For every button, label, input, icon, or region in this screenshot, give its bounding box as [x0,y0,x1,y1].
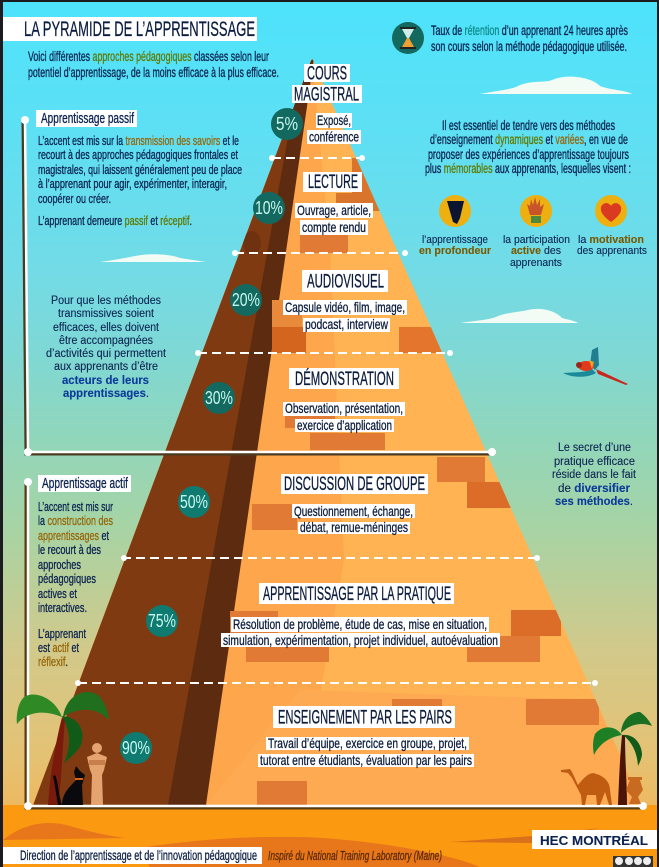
right intro text [425,118,631,176]
icon captions [419,234,647,269]
panel: passive learning: recourt à des approches pédagogiques frontales et [38,147,238,162]
icon: camel [561,769,612,805]
panel: active learning: L’apprenant [38,626,86,641]
pyramid bricks [230,158,599,805]
right note on diversifying methods: pratique efficace [554,456,635,468]
panel: active learning [38,475,131,669]
panel: active learning: le recourt à des [38,542,101,557]
left note on transmissive methods: transmissives soient [58,308,155,320]
level 6: apprentissage par la pratique: simulation, expérimentation, projet individuel, autoévaluation [223,632,498,648]
footer: direction label: Direction de l’apprentissage et de l’innovation pédagogique [20,847,257,863]
level 1: cours magistral: MAGISTRAL [294,84,359,106]
panel: active learning: actives et [38,586,77,601]
left note on transmissive methods: apprentissages. [63,388,149,400]
panel: passive learning: L’apprenant demeure passif et réceptif. [38,213,192,228]
panel: active learning: interactives. [38,600,87,615]
intro text: Voici différentes approches pédagogiques classées selon leur [28,48,269,64]
panel: passive learning: Apprentissage passif [41,111,135,127]
panel: passive learning: coopérer ou créer. [38,191,111,206]
level 5: discussion de groupe: 50% [180,492,208,512]
icon captions: la motivation [578,234,644,246]
level 2: lecture: Ouvrage, article, [297,202,371,218]
panel: active learning: est actif et [38,640,79,655]
level 7: enseignement par les pairs: 90% [122,738,150,758]
left note on transmissive methods: efficaces, elles doivent [53,322,160,334]
panel: active learning: apprentissages et [38,528,109,543]
panel: passive learning: magistrales, qui laissent généralement peu de place [38,162,242,177]
level 2: lecture: 10% [255,198,283,218]
right intro text: d’enseignement dynamiques et variées, en vue de [430,132,628,147]
logo: HEC Montréal [532,830,657,849]
level 7: enseignement par les pairs: ENSEIGNEMENT PAR LES PAIRS [278,708,452,728]
footer: direction label [3,847,262,864]
level 5: discussion de groupe: Questionnement, échange, [294,503,413,519]
left note on transmissive methods [46,295,167,400]
panel: active learning: pédagogiques [38,571,96,586]
level 5: discussion de groupe: débat, remue-méninges [300,519,408,535]
level 6: apprentissage par la pratique: 75% [148,611,176,631]
clouds [100,77,632,323]
icon: heart [595,195,627,227]
panel: active learning: L’accent est mis sur [38,499,113,514]
level 7: enseignement par les pairs [120,706,474,768]
frame: passive learning bracket [21,116,496,456]
level 7: enseignement par les pairs: Travail d’équipe, exercice en groupe, projet, [268,735,467,751]
retention legend text [431,23,628,54]
title: LA PYRAMIDE DE L’APPRENTISSAGE [24,18,255,41]
level 2: lecture: LECTURE [308,172,358,193]
ground and dunes [3,805,657,867]
dashed level separators [75,155,598,686]
icon captions: des apprenants [577,245,647,257]
icon: raised hand [520,195,552,227]
right note on diversifying methods [552,442,637,508]
left note on transmissive methods: aux apprenants d’être [54,361,158,373]
creative commons badge [613,856,653,867]
icon captions: apprenants [510,257,562,269]
level 1: cours magistral [271,64,362,144]
level 5: discussion de groupe [178,474,428,535]
left note on transmissive methods: Pour que les méthodes [51,295,161,307]
panel: passive learning: L’accent est mis sur la transmission des savoirs et le [38,133,239,148]
icon captions: l’apprentissage [422,234,488,246]
level 2: lecture [253,172,373,235]
icon: mummy statue [87,743,107,805]
right note on diversifying methods: de diversifier [558,483,631,495]
level 6: apprentissage par la pratique [146,583,500,648]
level 7: enseignement par les pairs: tutorat entre étudiants, évaluation par les pairs [260,752,472,768]
level 4: demonstration: Observation, présentation, [285,400,403,416]
panel: active learning: la construction des [38,513,113,528]
level 4: demonstration: exercice d’application [297,417,392,433]
frame: active learning bracket [24,478,647,810]
level 3: audiovisuel: Capsule vidéo, film, image, [285,299,405,315]
level 4: demonstration [203,368,405,433]
level 1: cours magistral: 5% [276,114,298,134]
left note on transmissive methods: acteurs de leurs [62,375,149,387]
intro text [28,48,279,80]
level 6: apprentissage par la pratique: APPRENTISSAGE PAR LA PRATIQUE [263,584,451,605]
right note on diversifying methods: Le secret d’une [558,442,631,454]
level 3: audiovisuel: AUDIOVISUEL [307,272,384,292]
level 1: cours magistral: COURS [307,64,347,84]
intro text: potentiel d’apprentissage, de la moins efficace à la plus efficace. [28,64,279,80]
level 2: lecture: compte rendu [302,219,366,235]
right note on diversifying methods: réside dans le fait [552,469,637,481]
panel: passive learning [36,110,242,228]
icon: parrot [563,347,628,385]
level 1: cours magistral: Exposé, [317,112,351,128]
left note on transmissive methods: d’activités qui permettent [46,348,167,360]
right note on diversifying methods: ses méthodes. [555,496,633,508]
left note on transmissive methods: être accompagnées [59,335,153,347]
level 5: discussion de groupe: DISCUSSION DE GROUPE [284,474,425,495]
level 4: demonstration: 30% [205,388,233,408]
level 3: audiovisuel [230,270,407,332]
level 1: cours magistral: conférence [309,128,359,144]
icon: deep learning [439,195,471,227]
icon: black cat [53,766,85,805]
icon captions: active des [511,245,561,257]
right palm tree [593,712,652,805]
level 3: audiovisuel: podcast, interview [305,316,389,332]
panel: active learning: approches [38,557,81,572]
panel: active learning: réflexif. [38,654,68,669]
hourglass icon [392,22,424,54]
icon captions: en profondeur [419,245,492,257]
icon: vase [626,777,643,804]
footer: source credit: Inspiré du National Training Laboratory (Maine) [268,848,442,863]
title [3,17,257,41]
level 4: demonstration: DÉMONSTRATION [295,369,394,390]
level 6: apprentissage par la pratique: Résolution de problème, étude de cas, mise en situation, [233,616,487,632]
panel: passive learning: à l’apprenant pour agir, expérimenter, interagir, [38,176,227,191]
left palm tree [17,692,109,805]
icon captions: la participation [503,234,570,246]
level 3: audiovisuel: 20% [232,290,260,310]
panel: active learning: Apprentissage actif [42,476,129,492]
logo: HEC Montréal: HEC MONTRÉAL [540,833,648,848]
